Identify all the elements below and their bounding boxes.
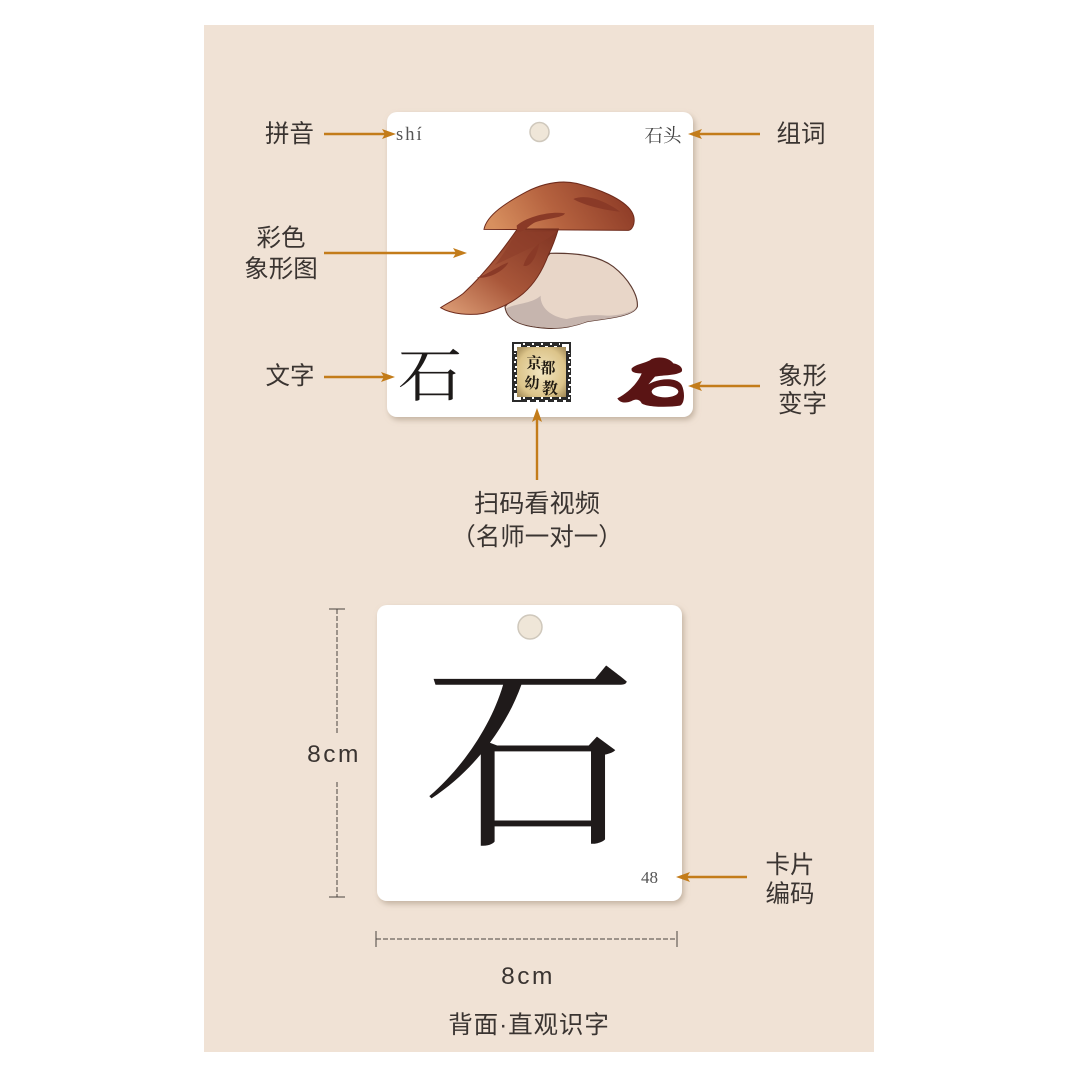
QR logo text	[524, 354, 558, 398]
height value: 8cm	[307, 741, 361, 768]
icon: stylised character	[617, 358, 684, 407]
icon: colour pictograph of rock	[441, 182, 637, 328]
QR logo text: 都	[540, 359, 556, 377]
arrow	[532, 408, 542, 480]
dimension: height	[307, 609, 361, 897]
label: card number	[676, 851, 814, 908]
QR code	[512, 342, 571, 402]
label: colour pictograph: 彩色	[256, 224, 306, 252]
dimension: width	[376, 931, 677, 990]
label: pinyin	[265, 120, 396, 148]
label: pictographic transformation: 变字	[778, 390, 827, 418]
QR logo text: 京	[526, 354, 542, 372]
label: word	[688, 120, 826, 148]
label: card number: 卡片	[766, 851, 814, 879]
arrow	[688, 129, 760, 139]
label: character: 文字	[266, 362, 314, 390]
arrow	[324, 129, 396, 139]
card hole	[530, 122, 549, 142]
pinyin: shí	[396, 125, 424, 145]
label: pinyin: 拼音	[265, 120, 314, 148]
label: colour pictograph	[244, 224, 467, 283]
arrow	[676, 872, 747, 882]
label: word: 组词	[776, 120, 826, 148]
label: card number: 编码	[766, 880, 814, 908]
arrow	[688, 381, 760, 391]
arrow	[324, 248, 467, 258]
arrow	[324, 372, 395, 382]
card number: 48	[641, 868, 658, 887]
panel: card back	[377, 605, 682, 901]
word: 石头	[644, 126, 682, 147]
rock shading	[506, 296, 637, 328]
label: colour pictograph: 象形图	[244, 255, 318, 283]
large character: 石	[423, 650, 636, 874]
label: pictographic transformation: 象形	[778, 362, 827, 390]
character: 石	[398, 346, 462, 409]
dark markings	[477, 197, 620, 278]
label: scan for video	[451, 408, 623, 551]
width value: 8cm	[501, 963, 555, 990]
rock body	[505, 253, 637, 328]
stone left stroke	[441, 229, 558, 314]
caption: 背面·直观识字	[448, 1011, 610, 1039]
label: scan for video: 扫码看视频	[474, 490, 600, 518]
label: pictographic transformation	[688, 362, 827, 418]
stone top stroke	[484, 182, 634, 230]
panel: card front	[387, 112, 693, 417]
background panel	[204, 25, 874, 1052]
card hole	[518, 615, 542, 639]
label: scan for video: （名师一对一）	[451, 523, 623, 551]
QR logo text: 幼	[524, 375, 540, 392]
label: character	[266, 362, 395, 390]
QR logo text: 教	[542, 379, 558, 398]
